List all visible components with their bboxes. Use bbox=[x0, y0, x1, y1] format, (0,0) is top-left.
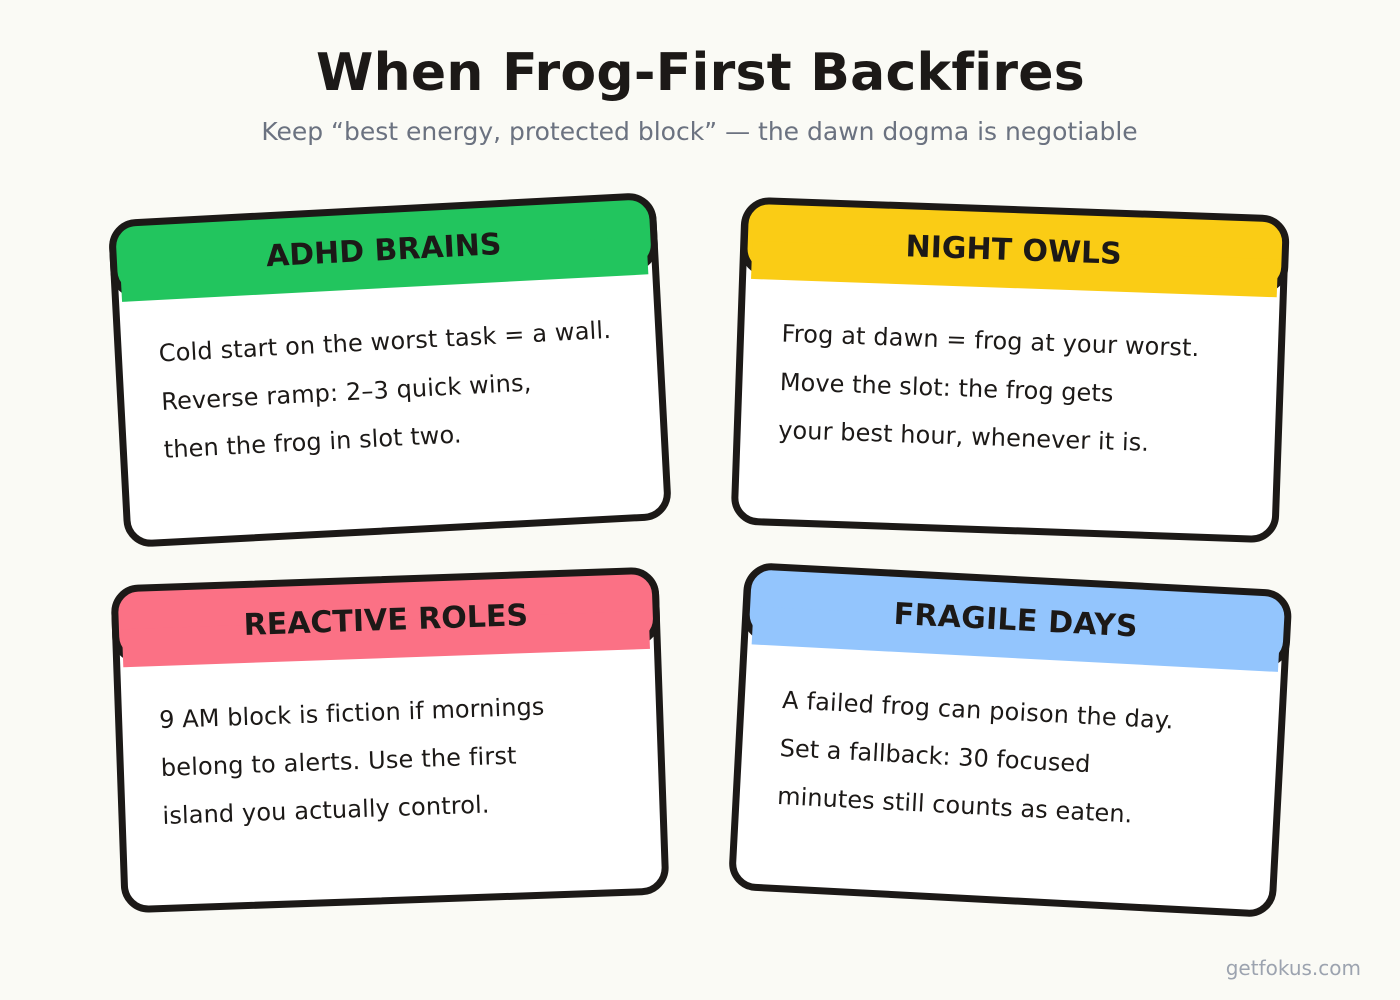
body text: Cold start on the worst task = a wall. bbox=[158, 316, 612, 368]
panel: Fragile days bbox=[731, 566, 1289, 914]
body text: then the frog in slot two. bbox=[163, 420, 462, 464]
card header bbox=[745, 566, 1289, 672]
body text: belong to alerts. Use the first bbox=[160, 742, 517, 782]
heading: FRAGILE DAYS bbox=[893, 597, 1139, 645]
body text: Frog at dawn = frog at your worst. bbox=[781, 320, 1200, 362]
panel: Night owls bbox=[734, 200, 1286, 540]
body text: Reverse ramp: 2–3 quick wins, bbox=[161, 369, 532, 416]
body text: your best hour, whenever it is. bbox=[778, 416, 1150, 457]
body text: Set a fallback: 30 focused bbox=[779, 734, 1091, 778]
card header bbox=[743, 200, 1286, 298]
heading: ADHD BRAINS bbox=[265, 227, 502, 274]
body text bbox=[778, 320, 1200, 459]
heading: NIGHT OWLS bbox=[905, 229, 1122, 272]
body text: Move the slot: the frog gets bbox=[779, 368, 1114, 408]
body text: island you actually control. bbox=[162, 791, 490, 830]
body text bbox=[158, 316, 617, 464]
heading: REACTIVE ROLES bbox=[243, 598, 529, 643]
footer credit: getfokus.com bbox=[1226, 956, 1361, 980]
card body bbox=[734, 201, 1286, 540]
card body bbox=[731, 567, 1288, 914]
panel: Reactive roles bbox=[114, 570, 666, 910]
body text: minutes still counts as eaten. bbox=[777, 782, 1133, 828]
panel: ADHD brains bbox=[111, 196, 669, 544]
subtitle: Keep “best energy, protected block” — the dawn dogma is negotiable bbox=[261, 117, 1138, 146]
body text: A failed frog can poison the day. bbox=[782, 686, 1174, 735]
card header bbox=[114, 570, 657, 667]
card body bbox=[114, 571, 666, 910]
title: When Frog-First Backfires bbox=[316, 43, 1085, 103]
body text bbox=[159, 693, 548, 830]
card body bbox=[112, 197, 669, 544]
body text bbox=[777, 686, 1174, 830]
body text: 9 AM block is fiction if mornings bbox=[159, 693, 545, 734]
card header bbox=[111, 196, 656, 302]
